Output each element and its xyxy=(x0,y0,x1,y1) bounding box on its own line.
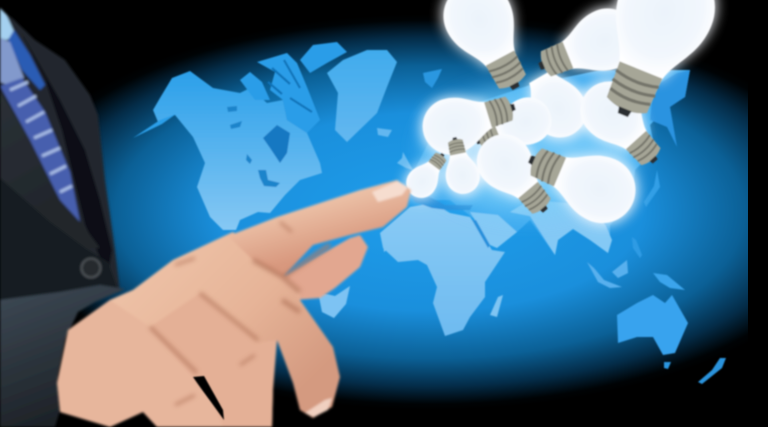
Iceland xyxy=(377,128,392,137)
Australia xyxy=(617,295,688,355)
index fingernail xyxy=(372,181,408,202)
Japan xyxy=(644,170,660,207)
bulb: middle left xyxy=(416,80,523,161)
Madagascar xyxy=(490,295,503,317)
right edge shade xyxy=(748,0,768,427)
back of hand and ring finger xyxy=(110,232,340,418)
finger creases and shadows xyxy=(150,222,330,405)
tie stripes xyxy=(10,82,72,192)
Sumatra and Java xyxy=(587,262,622,288)
fourth finger xyxy=(150,293,273,427)
Svalbard xyxy=(423,69,442,88)
glow around bulbs over the map xyxy=(425,88,635,212)
bulb: centre xyxy=(517,63,597,147)
bulb: smallest at fingertip xyxy=(400,145,455,204)
South America xyxy=(318,286,350,318)
businessman xyxy=(0,8,125,427)
bulb: lower centre xyxy=(466,123,566,228)
Russian far east xyxy=(650,70,690,147)
New Zealand xyxy=(698,358,726,384)
light bulbs xyxy=(398,0,732,235)
Mediterranean Sea xyxy=(410,195,473,210)
ring fingernail xyxy=(305,398,332,417)
middle finger xyxy=(270,235,368,300)
hand underlay xyxy=(57,232,300,427)
Red Sea xyxy=(472,220,490,248)
index finger xyxy=(228,180,411,277)
collar edge xyxy=(8,30,45,90)
suit jacket xyxy=(0,10,120,305)
Tasmania xyxy=(664,362,671,369)
jacket button xyxy=(82,258,100,278)
Eurasia xyxy=(404,70,690,255)
Arctic island channels xyxy=(268,60,312,112)
Alaska peninsula xyxy=(133,114,176,138)
British Isles xyxy=(397,152,413,170)
lower jacket front xyxy=(0,178,118,300)
bulb: small lower left xyxy=(438,134,483,197)
inner dark band xyxy=(20,30,112,275)
bulb: behind middle xyxy=(468,90,559,163)
hand xyxy=(57,180,411,427)
gap between fingers xyxy=(193,376,224,420)
bulb: top centre xyxy=(528,0,647,95)
Borneo xyxy=(612,260,628,278)
left lapel xyxy=(0,92,100,248)
bulb: right of centre xyxy=(569,70,677,181)
Philippines xyxy=(632,237,642,258)
world map xyxy=(133,42,726,384)
Great Lakes xyxy=(227,106,280,187)
shirt xyxy=(0,8,16,40)
Canadian Arctic islands xyxy=(240,42,347,133)
Arabia, India and South East Asia xyxy=(470,200,612,255)
necktie xyxy=(0,78,80,222)
Greenland xyxy=(327,50,397,142)
continent: North America xyxy=(153,71,322,230)
bulb: top left xyxy=(431,0,546,104)
little finger xyxy=(57,300,223,427)
Africa xyxy=(380,203,505,336)
South America, east of the wrist xyxy=(382,228,404,252)
Hudson Bay xyxy=(263,125,290,163)
sleeve xyxy=(0,285,125,427)
white halo behind bulbs xyxy=(398,0,732,235)
New Guinea xyxy=(653,273,685,290)
bulb: top right large xyxy=(578,0,730,133)
bulbs glass and caps xyxy=(400,0,730,233)
necktie knot xyxy=(0,38,24,86)
bulb: lower right xyxy=(517,129,646,233)
